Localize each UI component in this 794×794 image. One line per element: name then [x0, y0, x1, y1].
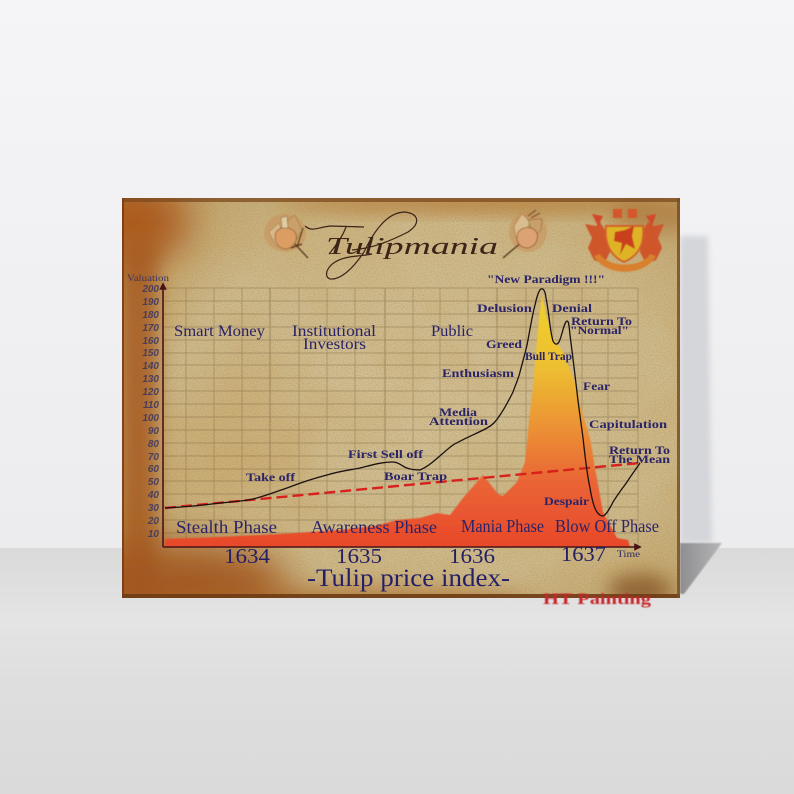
- icon: left tulip: [264, 214, 308, 258]
- y-axis scale labels: 120: [142, 387, 159, 398]
- sentiment annotations: Greed: [486, 339, 523, 351]
- x-axis year labels: Time: [617, 549, 640, 559]
- y-axis scale labels: 130: [142, 374, 159, 385]
- x-axis year labels: [224, 542, 640, 568]
- investor group headings: Investors: [303, 336, 366, 353]
- phase labels: Stealth Phase: [176, 517, 277, 537]
- y-axis scale labels: 60: [148, 464, 159, 475]
- y-axis scale labels: 170: [142, 323, 159, 334]
- area chart: price volume: [165, 295, 630, 547]
- icon: right tulip: [503, 210, 547, 258]
- sentiment annotations: Fear: [583, 381, 610, 393]
- sentiment annotations: "Normal": [570, 325, 629, 337]
- chart: [160, 284, 640, 550]
- x-axis year labels: 1637: [561, 542, 606, 566]
- y-axis scale labels: Valuation: [127, 273, 170, 283]
- parchment canvas panel: [122, 198, 680, 598]
- y-axis scale labels: 70: [148, 452, 159, 463]
- y-axis scale labels: 30: [148, 503, 159, 514]
- y-axis scale labels: 90: [148, 426, 159, 437]
- title: Tulipmania: [326, 234, 498, 260]
- investor group headings: [174, 323, 473, 353]
- investor group headings: Smart Money: [174, 323, 265, 340]
- y-axis scale labels: 80: [148, 439, 159, 450]
- sentiment annotations: [246, 274, 671, 508]
- chart caption: -Tulip price index-: [307, 565, 510, 592]
- sentiment annotations: Return To: [571, 316, 632, 328]
- phase labels: Blow Off Phase: [555, 516, 659, 536]
- red dashed mean line: [165, 463, 640, 508]
- sentiment annotations: Capitulation: [589, 419, 668, 431]
- title: [305, 212, 498, 279]
- phase labels: Mania Phase: [461, 516, 544, 536]
- phase labels: [176, 516, 659, 537]
- x-axis year labels: 1635: [336, 544, 382, 568]
- sentiment annotations: Bull Trap: [525, 351, 572, 363]
- sentiment annotations: "New Paradigm !!!": [487, 274, 605, 286]
- y-axis scale labels: 100: [142, 413, 159, 424]
- phase labels: Awareness Phase: [311, 517, 437, 537]
- sentiment annotations: Enthusiasm: [442, 368, 515, 380]
- sentiment annotations: Boar Trap: [384, 471, 447, 483]
- sentiment annotations: First Sell off: [348, 449, 423, 461]
- y-axis scale labels: 10: [148, 529, 159, 540]
- y-axis scale labels: 110: [143, 400, 159, 411]
- sentiment annotations: The Mean: [609, 454, 671, 466]
- x-axis year labels: 1634: [224, 544, 271, 568]
- y-axis scale labels: 160: [142, 336, 159, 347]
- y-axis scale labels: [127, 273, 170, 540]
- investor group headings: Public: [431, 323, 473, 340]
- icon: coat of arms crest: [585, 209, 664, 272]
- y-axis scale labels: 50: [148, 477, 159, 488]
- sentiment annotations: Despair: [544, 496, 589, 508]
- sentiment annotations: Return To: [609, 445, 670, 457]
- y-axis scale labels: 140: [142, 361, 159, 372]
- sentiment annotations: Denial: [552, 303, 592, 315]
- sentiment annotations: Attention: [429, 416, 489, 428]
- investor group headings: Institutional: [292, 323, 377, 340]
- y-axis scale labels: 200: [141, 284, 159, 295]
- black price curve: [165, 289, 640, 516]
- sentiment annotations: Media: [439, 407, 478, 419]
- sentiment annotations: Delusion: [477, 303, 533, 315]
- y-axis scale labels: 40: [147, 490, 159, 501]
- y-axis scale labels: 190: [142, 297, 159, 308]
- y-axis scale labels: 180: [142, 310, 159, 321]
- y-axis scale labels: 150: [142, 348, 159, 359]
- chart grid: [163, 288, 638, 547]
- axes: [160, 284, 640, 550]
- canvas cast shadow: [680, 236, 722, 594]
- watermark: HT Painting: [543, 591, 651, 608]
- sentiment annotations: Take off: [246, 472, 295, 484]
- x-axis year labels: 1636: [449, 544, 495, 568]
- y-axis scale labels: 20: [147, 516, 159, 527]
